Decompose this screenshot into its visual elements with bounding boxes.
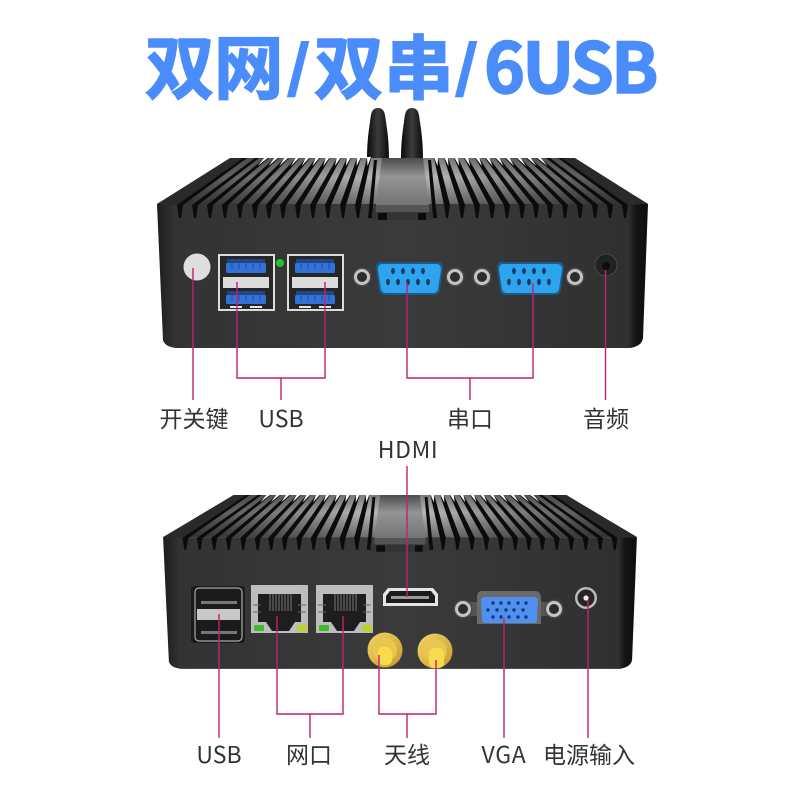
callout: USB bracket xyxy=(237,282,325,400)
label: power input: 电源输入 xyxy=(543,736,635,770)
callout: power button line xyxy=(192,268,194,400)
icon: HDMI port xyxy=(383,588,438,606)
callout: VGA line xyxy=(503,618,505,738)
callout: antenna bracket xyxy=(379,655,436,738)
icon: left antenna xyxy=(367,108,389,160)
icon: antenna connector 1 xyxy=(368,632,402,668)
icon: audio jack xyxy=(595,254,617,276)
label: USB bottom: USB xyxy=(196,736,242,770)
label: HDMI: HDMI xyxy=(378,431,438,465)
title: 双 xyxy=(314,13,384,114)
icon: right antenna xyxy=(401,108,423,160)
panel: rear view device xyxy=(163,494,637,669)
label: USB top: USB xyxy=(258,400,304,434)
title: / xyxy=(288,23,309,102)
chassis: rear xyxy=(163,494,637,669)
title: 串 xyxy=(384,13,454,114)
icon: VGA port xyxy=(454,591,564,624)
label: serial: 串口 xyxy=(447,400,493,434)
icon: power button xyxy=(184,254,210,280)
title: / xyxy=(456,23,477,102)
callout: rear USB line xyxy=(218,614,220,738)
label: power key: 开关键 xyxy=(160,400,228,434)
icon: LAN port 2 xyxy=(316,585,373,633)
panel: front view device xyxy=(157,108,648,348)
icon: LAN port 1 xyxy=(251,585,308,633)
callout: HDMI line xyxy=(406,466,408,597)
title: 6USB xyxy=(484,13,656,114)
icon: USB port pair left xyxy=(219,255,274,310)
icon: USB port pair right xyxy=(288,255,343,310)
callout: LAN bracket xyxy=(277,616,343,738)
icon: status LED xyxy=(276,259,284,267)
icon: serial port 1 xyxy=(352,262,464,295)
title: 双 xyxy=(145,13,214,114)
title: 网 xyxy=(214,13,284,114)
label: VGA: VGA xyxy=(481,736,527,770)
icon: serial port 2 xyxy=(472,262,584,295)
label: antenna: 天线 xyxy=(384,736,430,770)
callout: audio line xyxy=(604,270,606,400)
label: LAN: 网口 xyxy=(286,736,332,770)
callout: power input line xyxy=(587,600,589,738)
label: audio: 音频 xyxy=(583,400,629,434)
icon: black USB ports xyxy=(191,586,245,643)
icon: power input jack xyxy=(575,587,597,609)
chassis: front xyxy=(157,157,648,348)
callout: serial bracket xyxy=(407,282,533,400)
icon: antenna connector 2 xyxy=(418,634,452,668)
